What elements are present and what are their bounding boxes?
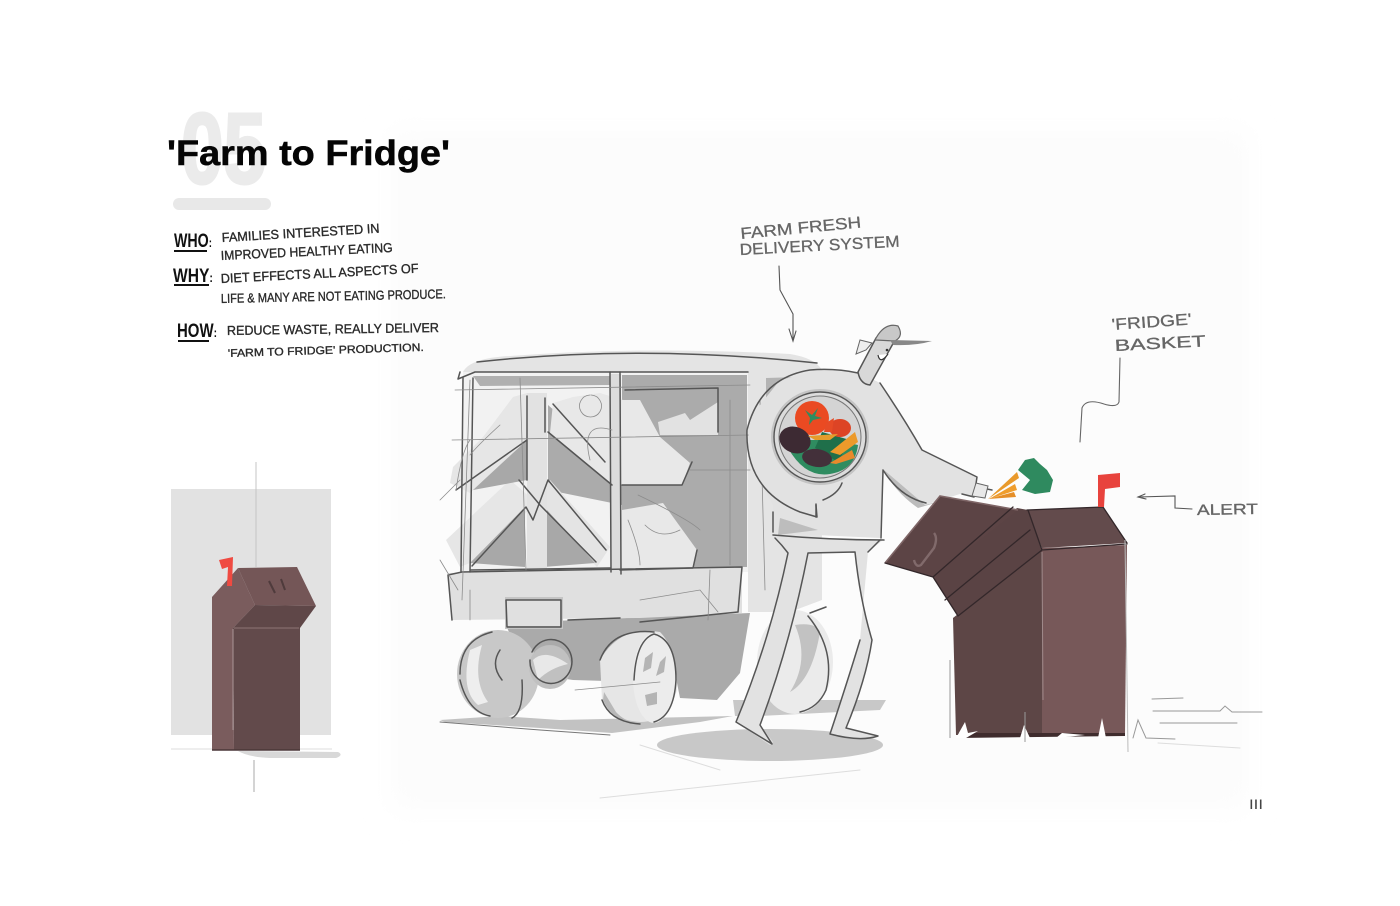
label: fridge basket: BASKET bbox=[1114, 333, 1206, 355]
title: 'Farm to Fridge' bbox=[167, 134, 450, 173]
middle wheel bbox=[600, 631, 677, 724]
text block: who why how bbox=[173, 221, 446, 360]
roof lines bbox=[458, 353, 817, 379]
head and cap bbox=[856, 325, 932, 385]
basket lid bbox=[885, 496, 1018, 577]
small alert flag bbox=[219, 557, 233, 586]
who: FAMILIES INTERESTED IN bbox=[221, 221, 380, 245]
rear bumper panel bbox=[448, 567, 742, 620]
fridge basket bbox=[885, 496, 1128, 752]
arrow: to flag bbox=[1138, 494, 1192, 509]
legs bbox=[736, 537, 883, 745]
how bbox=[177, 320, 439, 360]
produce crates bbox=[450, 393, 527, 493]
why bbox=[173, 261, 446, 306]
rear wheels bbox=[457, 630, 572, 718]
why: LIFE & MANY ARE NOT EATING PRODUCE. bbox=[221, 286, 446, 306]
open lid interior bbox=[933, 508, 1042, 616]
big faint section number: 05 bbox=[181, 93, 266, 205]
who: IMPROVED HEALTHY EATING bbox=[220, 240, 393, 263]
label: alert: ALERT bbox=[1197, 501, 1258, 519]
small basket concept panel bbox=[171, 462, 341, 792]
torso and sleeve bbox=[748, 370, 977, 538]
label: farm fresh delivery system: DELIVERY SYSTEM bbox=[739, 234, 900, 259]
ground shadow under the truck bbox=[440, 700, 886, 733]
arrow: to truck bbox=[779, 266, 796, 341]
delivery man character bbox=[736, 325, 992, 745]
label: farm fresh delivery system: FARM FRESH bbox=[740, 214, 862, 243]
basket side and front faces bbox=[1042, 545, 1127, 735]
hand bbox=[972, 483, 988, 498]
label: fridge basket: 'FRIDGE' bbox=[1111, 311, 1192, 334]
how: 'FARM TO FRIDGE' PRODUCTION. bbox=[228, 342, 424, 360]
who bbox=[174, 221, 393, 263]
carrots with greens bbox=[988, 458, 1053, 499]
label: farm fresh delivery system bbox=[739, 214, 900, 259]
why: DIET EFFECTS ALL ASPECTS OF bbox=[220, 261, 419, 286]
window and mountains bbox=[658, 402, 718, 435]
label: fridge basket bbox=[1111, 311, 1206, 355]
page mark: III bbox=[1249, 796, 1263, 812]
tomato bbox=[795, 401, 829, 435]
grass and ground strokes bbox=[440, 698, 1262, 798]
front wheel bbox=[757, 607, 833, 714]
man shadow on the ground bbox=[657, 729, 883, 761]
why: WHY: bbox=[173, 266, 213, 287]
eggplants bbox=[775, 422, 815, 458]
small basket bbox=[212, 567, 316, 750]
truck chassis bbox=[505, 613, 750, 700]
center dark band bbox=[548, 405, 622, 505]
basket top bbox=[1027, 507, 1127, 548]
delivery truck sketch bbox=[440, 350, 833, 724]
how: REDUCE WASTE, REALLY DELIVER bbox=[227, 320, 439, 338]
bowl of produce bbox=[771, 389, 869, 485]
arrow: to basket bbox=[1080, 358, 1120, 442]
alert flag bbox=[1098, 473, 1120, 507]
truck body bbox=[440, 350, 833, 724]
carrots in bowl bbox=[808, 434, 838, 440]
who: WHO: bbox=[174, 231, 212, 252]
crate braces bbox=[456, 396, 697, 570]
basket shadow bbox=[238, 751, 341, 758]
how: HOW: bbox=[177, 321, 217, 342]
